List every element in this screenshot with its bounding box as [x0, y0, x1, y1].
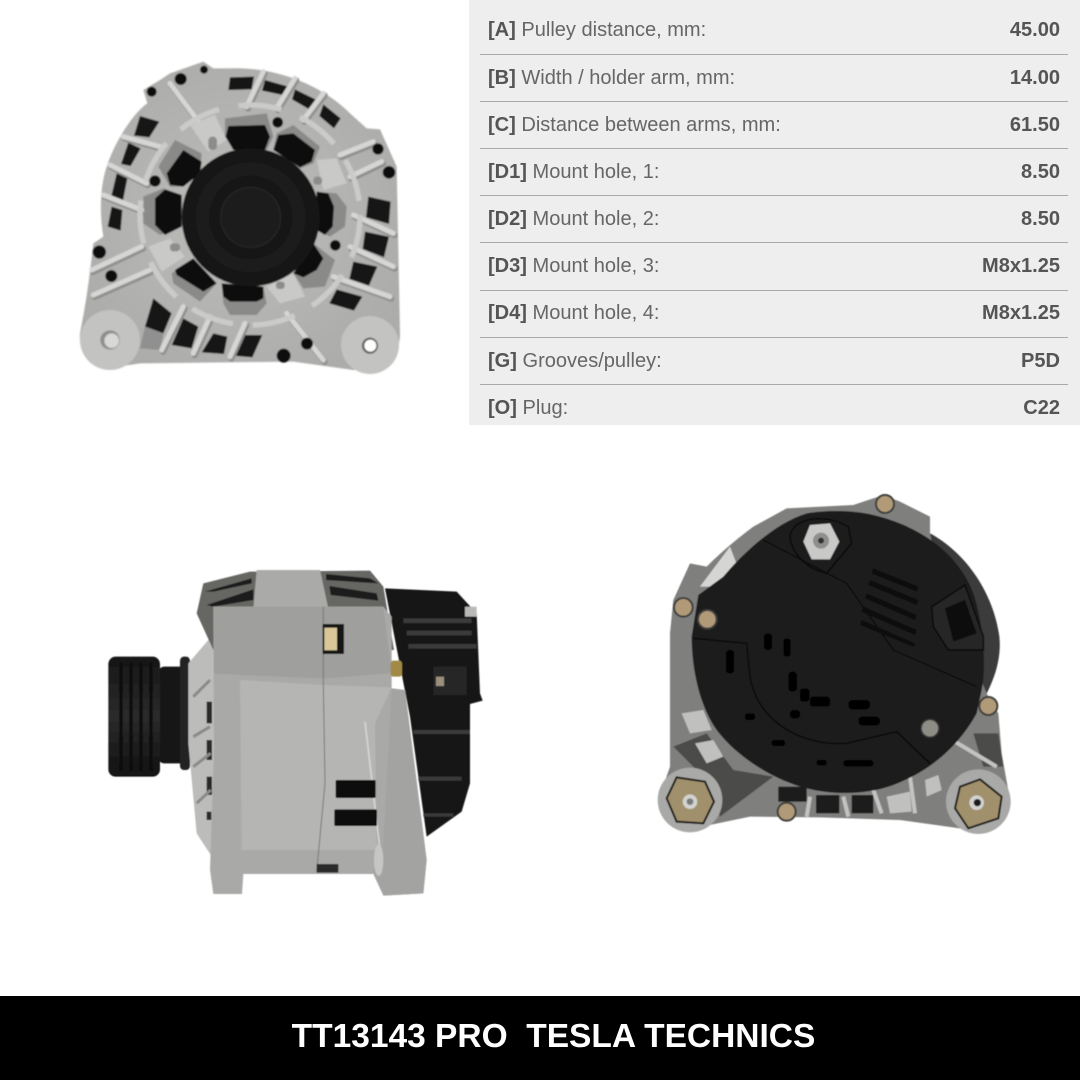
row: mount hole 4 [488, 302, 1060, 324]
row: mount hole 2 [488, 208, 1060, 230]
row: mount hole 3: [D3] Mount hole, 3: [488, 255, 659, 277]
row: holder arm width: 14.00 [1010, 67, 1060, 89]
row: distance between arms: [C] Distance between arms, mm: [488, 114, 781, 136]
row: grooves per pulley: P5D [1021, 350, 1060, 372]
photo: alternator side view [108, 570, 484, 896]
row: pulley distance: [A] Pulley distance, mm: [488, 19, 706, 41]
row: mount hole 2: [D2] Mount hole, 2: [488, 208, 659, 230]
row: mount hole 4: M8x1.25 [982, 302, 1060, 324]
row: mount hole 3: M8x1.25 [982, 255, 1060, 277]
photo: alternator front view [79, 61, 401, 375]
row: distance between arms: 61.50 [1010, 114, 1060, 136]
row: pulley distance [488, 19, 1060, 41]
row: distance between arms [488, 114, 1060, 136]
row: holder arm width: [B] Width / holder arm, mm: [488, 67, 735, 89]
row: plug: [O] Plug: [488, 397, 568, 419]
row: pulley distance: 45.00 [1010, 19, 1060, 41]
footer banner: TT13143 PRO TESLA TECHNICS [292, 1018, 815, 1055]
row: mount hole 1: [D1] Mount hole, 1: [488, 161, 659, 183]
row: plug [488, 397, 1060, 419]
row: mount hole 3 [488, 255, 1060, 277]
row: mount hole 4: [D4] Mount hole, 4: [488, 302, 659, 324]
row: mount hole 2: 8.50 [1021, 208, 1060, 230]
row: grooves per pulley [488, 350, 1060, 372]
row: grooves per pulley: [G] Grooves/pulley: [488, 350, 662, 372]
row: mount hole 1 [488, 161, 1060, 183]
panel: specification table [469, 0, 1080, 425]
row: holder arm width [488, 67, 1060, 89]
photo: alternator rear view [657, 493, 1012, 834]
row: plug: C22 [1023, 397, 1060, 419]
row: mount hole 1: 8.50 [1021, 161, 1060, 183]
footer banner [0, 996, 1080, 1080]
